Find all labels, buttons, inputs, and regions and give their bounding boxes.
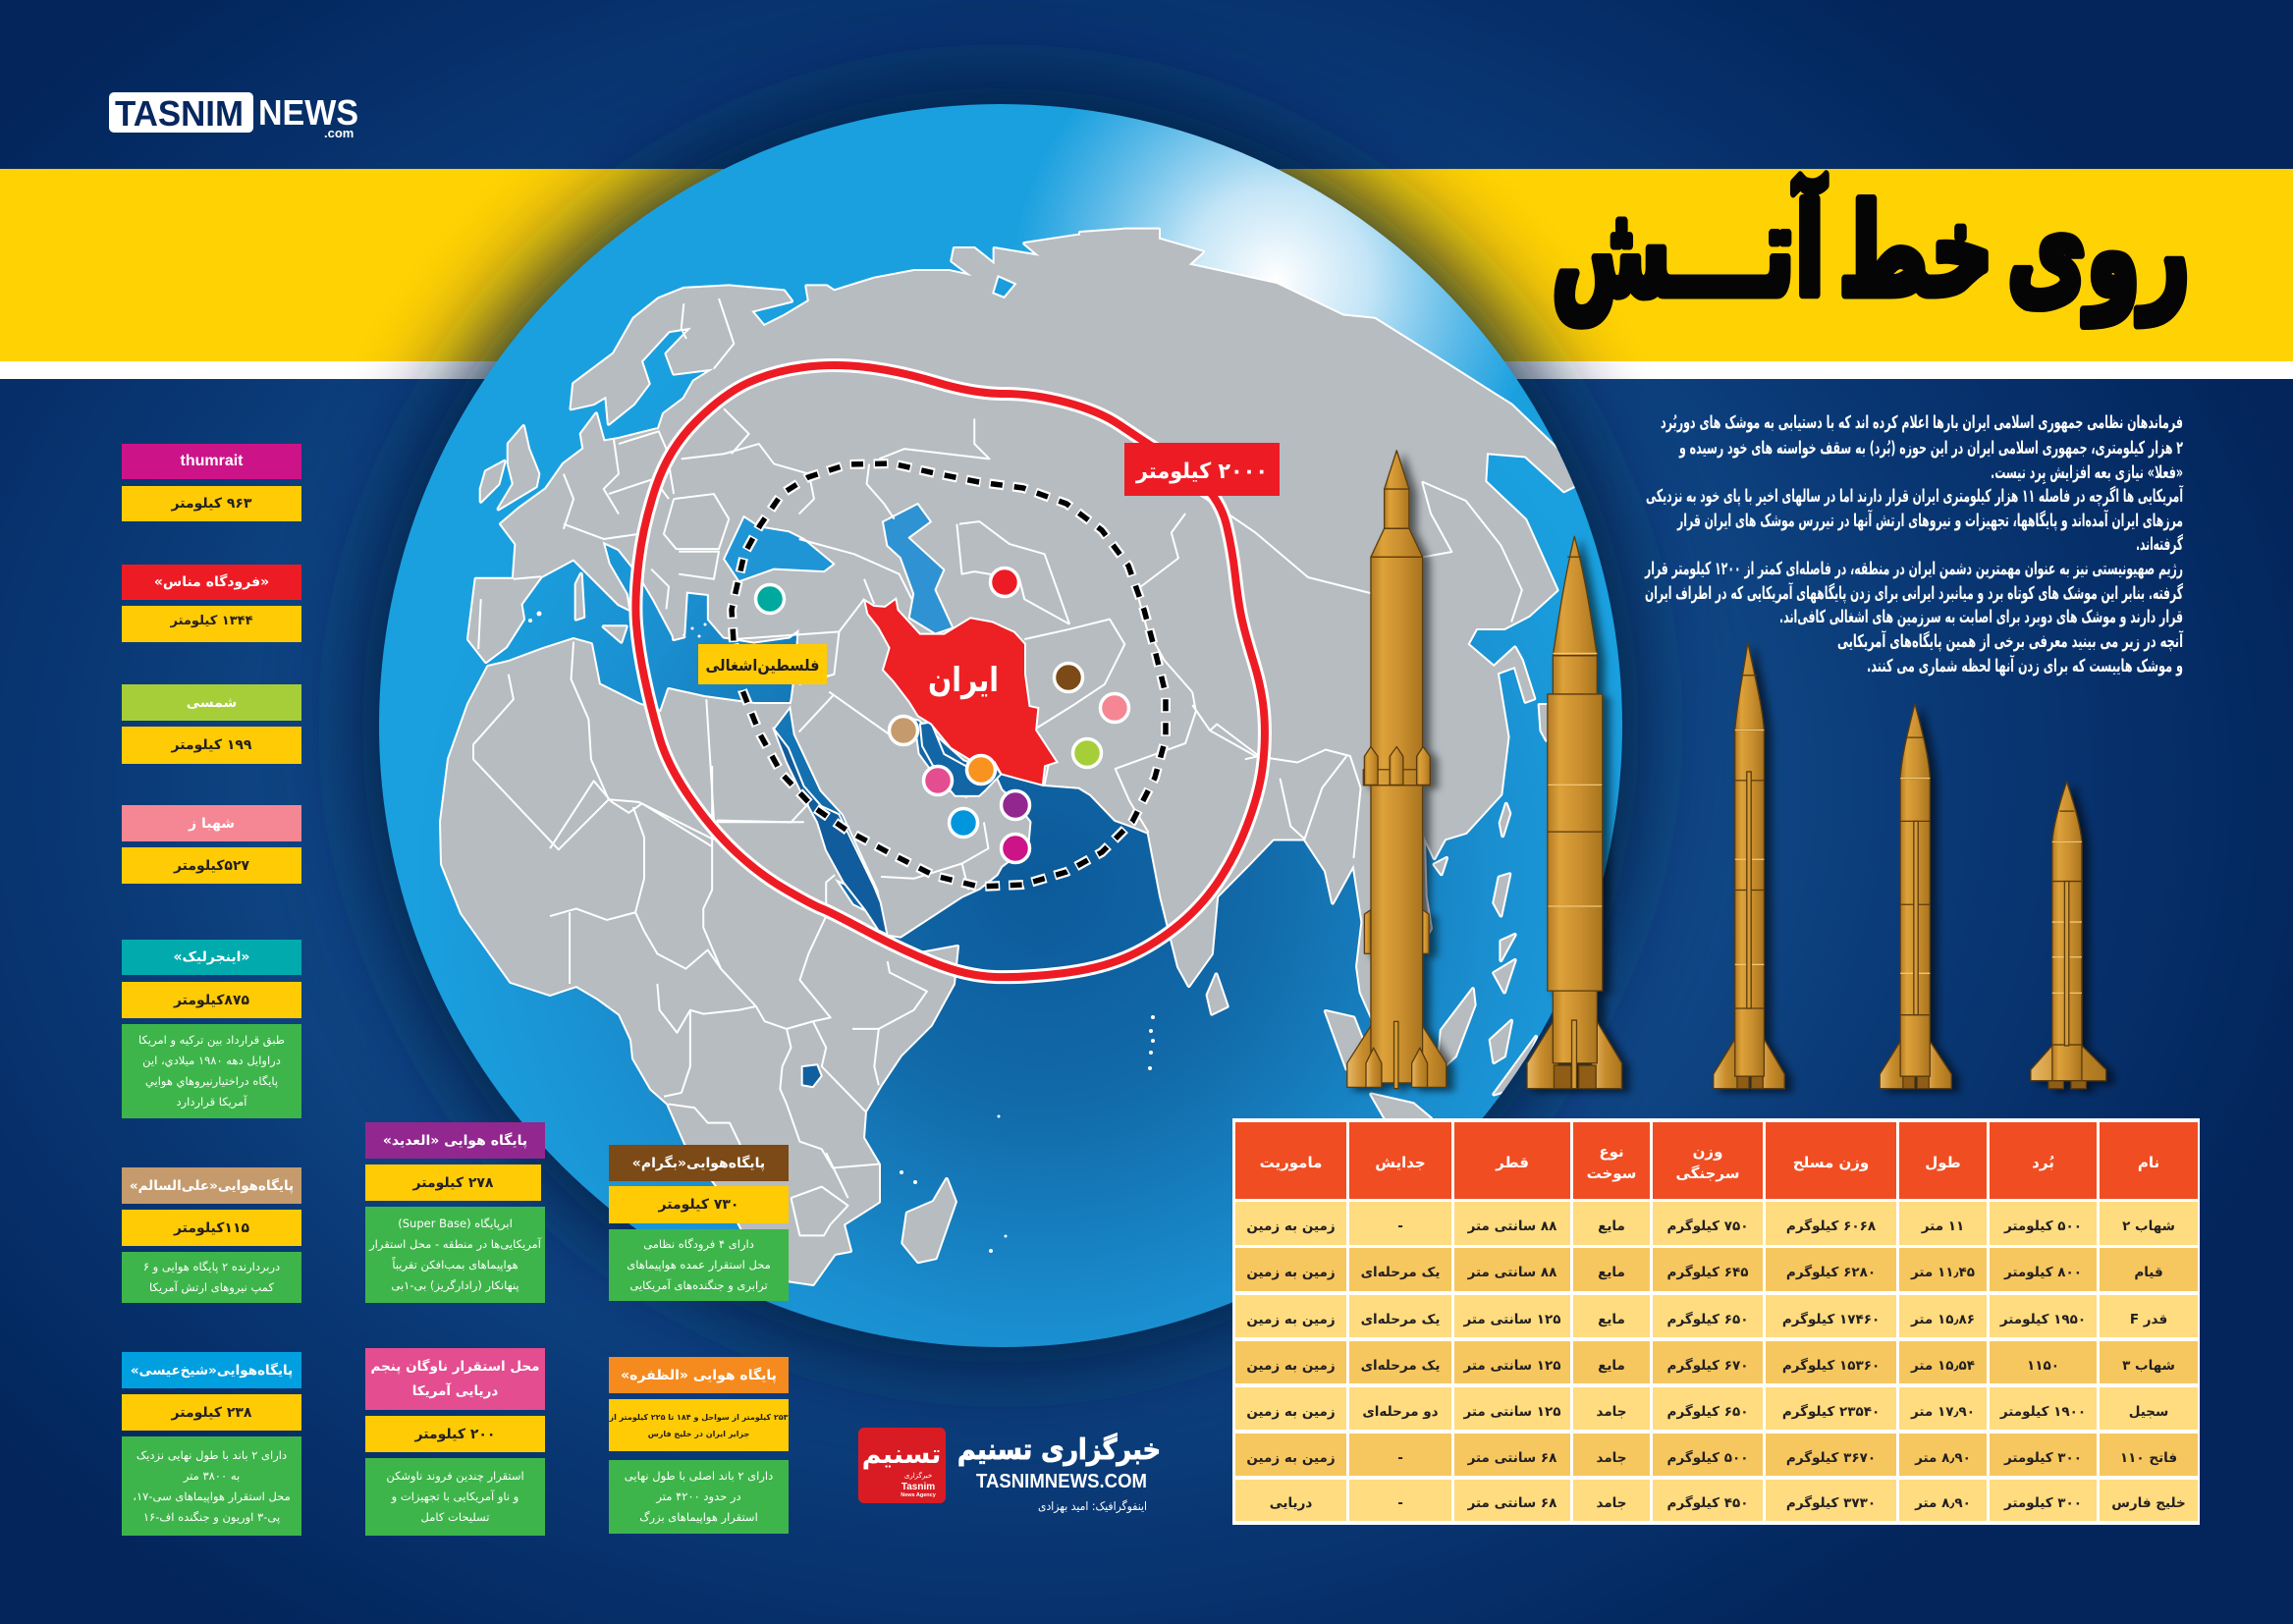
row: Sejjil: سجیل	[2129, 1404, 2168, 1420]
icon: red Tasnim badge: تسنیم	[862, 1439, 941, 1470]
intro paragraph	[1644, 412, 2184, 677]
intro paragraph: گرفته‌اند.	[2136, 533, 2183, 555]
description: به ۳۸۰۰ متر	[184, 1469, 240, 1483]
distance	[122, 1394, 301, 1431]
footer logo: Tasnim News Agency	[858, 1428, 1161, 1514]
card title	[365, 1122, 545, 1159]
distance: ۱۳۴۴ کیلومتر	[170, 614, 253, 628]
card title	[122, 684, 301, 721]
card title	[122, 444, 301, 479]
row: Shahab 2: شهاب ۲	[2122, 1218, 2175, 1234]
description: پنهانکار (رادارگریز) بی-۱بی	[391, 1278, 519, 1292]
card title: thumrait	[181, 453, 244, 469]
card title: پایگاه‌هوایی«بگرام»	[632, 1155, 765, 1170]
row: Qadr F: یک مرحله‌ای	[1361, 1312, 1440, 1327]
row: Qiam: ۸۰۰ کیلومتر	[2004, 1265, 2082, 1280]
table header: وزن	[1693, 1143, 1722, 1161]
row: Persian Gulf: دریایی	[1270, 1495, 1312, 1511]
row: Shahab 3	[1235, 1341, 2198, 1383]
table header: وزن مسلح	[1793, 1154, 1869, 1171]
description	[365, 1207, 545, 1303]
label: occupied Palestine: فلسطین‌اشغالی	[705, 656, 819, 675]
description: استقرار چندین فروند ناوشکن	[386, 1469, 524, 1483]
missile 2	[1527, 536, 1622, 1089]
table header: قطر	[1496, 1154, 1529, 1171]
description: دراوایل دهه ۱۹۸۰ میلادي، این	[142, 1054, 281, 1067]
row: Qiam: ۶۴۵ کیلوگرم	[1667, 1265, 1748, 1280]
card: Al Udeid	[365, 1122, 545, 1303]
label: 2000 km: ۲۰۰۰ کیلومتر	[1135, 460, 1268, 484]
row: Fateh 110: -	[1397, 1450, 1403, 1466]
country borders	[473, 298, 1522, 1235]
card title	[122, 1352, 301, 1388]
card title: پایگاه هوایی «الظفره»	[621, 1367, 777, 1382]
description: آمریکا قراردارد	[177, 1095, 247, 1109]
row: Qiam	[1235, 1248, 2198, 1291]
missile 3	[1714, 642, 1784, 1089]
description: آمریکایی‌ها در منطقه - محل استقرار	[369, 1237, 541, 1251]
description: ترابری و جنگنده‌های آمریکایی	[629, 1278, 768, 1292]
row: Sejjil: جامد	[1597, 1404, 1626, 1420]
row: Sejjil: ۱۲۵ سانتی متر	[1464, 1404, 1561, 1420]
card title	[122, 940, 301, 975]
card: Shamsi	[122, 684, 301, 764]
distance: ۲۰۰ کیلومتر	[415, 1426, 495, 1441]
yellow title band	[0, 169, 2293, 361]
row: Qiam: ۶۲۸۰ کیلوگرم	[1786, 1265, 1876, 1280]
row: Persian Gulf: ۶۸ سانتی متر	[1468, 1495, 1556, 1511]
description: هواپیماهای بمب‌افکن تقریباً	[392, 1258, 519, 1272]
row: Qadr F: قدر F	[2130, 1312, 2167, 1327]
row: Shahab 2: ۶۰۶۸ کیلوگرم	[1786, 1218, 1876, 1234]
distance	[609, 1399, 789, 1451]
card title: دریایی آمریکا	[412, 1382, 498, 1398]
row: Qadr F: ۱۷۴۶۰ کیلوگرم	[1782, 1312, 1880, 1327]
card: Shahbaz	[122, 805, 301, 884]
logo: Tasnim News: NEWS	[258, 92, 358, 133]
description	[365, 1458, 545, 1536]
description: پایگاه دراختیارنیروهاي هوایي	[145, 1074, 278, 1088]
row: Sejjil: ۲۳۵۴۰ کیلوگرم	[1782, 1404, 1880, 1420]
distance: ۲۳۸ کیلومتر	[172, 1404, 251, 1420]
description: استقرار هواپیماهای بزرگ	[639, 1510, 758, 1524]
distance: ۸۷۵کیلومتر	[174, 992, 249, 1007]
row: Persian Gulf: خلیج فارس	[2111, 1495, 2186, 1511]
row: Shahab 2: -	[1397, 1218, 1403, 1234]
distance: ۹۶۳ کیلومتر	[172, 496, 251, 512]
card title: شمسی	[187, 695, 237, 711]
card: Ali Al Salem	[122, 1167, 301, 1303]
row: Shahab 3: ۶۷۰ کیلوگرم	[1667, 1358, 1748, 1374]
icon: red Tasnim badge: News Agency	[901, 1492, 937, 1498]
distance	[122, 847, 301, 884]
table header: سرجنگی	[1676, 1164, 1739, 1182]
table header: جدایش	[1375, 1154, 1426, 1171]
table header: سوخت	[1587, 1164, 1636, 1182]
row: Persian Gulf: ۸٫۹۰ متر	[1915, 1495, 1971, 1511]
row: Shahab 3: ۱۵۳۶۰ کیلوگرم	[1782, 1358, 1880, 1374]
row: Shahab 3: یک مرحله‌ای	[1361, 1358, 1440, 1374]
description	[122, 1436, 301, 1536]
description	[609, 1229, 789, 1301]
logo: Tasnim News: .com	[324, 126, 354, 140]
footer logo: Tasnim News Agency: اینفوگرافیک: امید بهزادی	[1038, 1499, 1147, 1514]
missile 1	[1347, 451, 1447, 1089]
row: Fateh 110: فاتح ۱۱۰	[2120, 1450, 2177, 1466]
card: Manas	[122, 565, 301, 642]
row: Persian Gulf: -	[1397, 1495, 1403, 1511]
row: Shahab 3: شهاب ۳	[2122, 1358, 2175, 1374]
description: محل استقرار عمده هواپیماهای	[627, 1258, 771, 1272]
row: Sejjil	[1235, 1387, 2198, 1430]
description: محل استقرار هواپیماهای سی-۱۷،	[133, 1489, 291, 1502]
row: Fateh 110: ۳۶۷۰ کیلوگرم	[1786, 1450, 1876, 1466]
intro paragraph: آمریکایی ها اگرچه در فاصله ۱۱ هزار کیلومتری ایران قرار دارند اما در سالهای اخیر با پای خود به نزدیکی	[1646, 484, 2183, 507]
label: Iran: ایران	[928, 661, 999, 700]
card: Fifth Fleet	[365, 1348, 545, 1536]
row: Persian Gulf	[1235, 1480, 2198, 1521]
card title	[122, 1167, 301, 1204]
distance	[122, 727, 301, 764]
table header: طول	[1925, 1154, 1961, 1171]
row: Shahab 3: ۱۲۵ سانتی متر	[1464, 1358, 1561, 1374]
distance	[122, 606, 301, 642]
row: Sejjil: دو مرحله‌ای	[1362, 1404, 1439, 1420]
row: Qiam: مایع	[1598, 1265, 1625, 1280]
description: پی-۳ اوریون و جنگنده اف-۱۶	[143, 1510, 280, 1524]
row: Shahab 2: مایع	[1598, 1218, 1625, 1234]
row: Qadr F: ۱۲۵ سانتی متر	[1464, 1312, 1561, 1327]
distance: ۷۳۰ کیلومتر	[659, 1197, 738, 1213]
row: Fateh 110: ۳۰۰ کیلومتر	[2004, 1450, 2082, 1466]
row: Sejjil: ۱۹۰۰ کیلومتر	[2000, 1404, 2086, 1420]
card title: پایگاه‌هوایی«علی‌السالم»	[130, 1178, 294, 1194]
table header: نوع	[1599, 1143, 1624, 1161]
distance	[365, 1416, 545, 1452]
description: دربردارنده ۲ پایگاه هوایی و ۶	[143, 1260, 280, 1273]
distance	[365, 1164, 541, 1201]
distance: جزایر ایران در خلیج فارس	[648, 1430, 749, 1437]
distance: ۲۷۸ کیلومتر	[413, 1174, 493, 1190]
logo: Tasnim News	[109, 92, 358, 140]
description: کمپ نیروهای ارتش آمریکا	[149, 1280, 274, 1294]
distance	[122, 486, 301, 521]
globe shadow	[362, 87, 1639, 1364]
label: 2000 km	[1124, 443, 1280, 496]
table header: بُرد	[2032, 1154, 2054, 1171]
distance	[609, 1186, 789, 1223]
card title	[122, 805, 301, 841]
row: Shahab 3: مایع	[1598, 1358, 1625, 1374]
row: Fateh 110: زمین به زمین	[1246, 1450, 1336, 1466]
description: و ناو آمریکایی با تجهیزات و	[392, 1489, 519, 1503]
row: Sejjil: زمین به زمین	[1246, 1404, 1336, 1420]
footer logo: Tasnim News Agency: خبرگزاری تسنیم	[957, 1433, 1161, 1466]
row: Qiam: ۱۱٫۴۵ متر	[1911, 1265, 1975, 1280]
distance: ۵۲۷کیلومتر	[174, 858, 249, 874]
row: Qiam: یک مرحله‌ای	[1361, 1265, 1440, 1280]
row: Shahab 2: زمین به زمین	[1246, 1218, 1336, 1234]
row: Shahab 3: ۱۱۵۰	[2027, 1358, 2059, 1374]
base location markers	[756, 568, 1129, 862]
card: Sheikh Isa	[122, 1352, 301, 1536]
description	[122, 1024, 301, 1118]
row: Fateh 110: ۸٫۹۰ متر	[1915, 1450, 1971, 1466]
row: Qadr F: زمین به زمین	[1246, 1312, 1336, 1327]
description	[609, 1460, 789, 1534]
description: در حدود ۴۲۰۰ متر	[656, 1489, 741, 1503]
row: Qadr F: ۶۵۰ کیلوگرم	[1667, 1312, 1748, 1327]
table header: ماموریت	[1260, 1154, 1322, 1171]
label: occupied Palestine	[698, 644, 827, 684]
row: Persian Gulf: ۴۵۰ کیلوگرم	[1667, 1495, 1748, 1511]
row: Shahab 2: ۵۰۰ کیلومتر	[2004, 1218, 2082, 1234]
description	[122, 1252, 301, 1303]
distance: ۱۹۹ کیلومتر	[172, 737, 251, 753]
table header: نام	[2138, 1154, 2159, 1171]
row: Qadr F: مایع	[1598, 1312, 1625, 1327]
card: Al Dhafra	[609, 1357, 789, 1534]
row: Qadr F	[1235, 1295, 2198, 1337]
card: Bagram	[609, 1145, 789, 1301]
missile 4	[1880, 704, 1951, 1089]
row: Qiam: قیام	[2134, 1265, 2163, 1280]
card title: محل استقرار ناوگان پنجم	[370, 1359, 540, 1375]
card title	[609, 1145, 789, 1181]
card: Incirlik	[122, 940, 301, 1118]
footer logo: Tasnim News Agency: TASNIMNEWS.COM	[976, 1471, 1147, 1492]
row: Fateh 110: ۵۰۰ کیلوگرم	[1667, 1450, 1748, 1466]
table: missile specifications	[1232, 1118, 2200, 1525]
card title: پایگاه‌هوایی«شیخ‌عیسی»	[131, 1363, 293, 1379]
card title: «اینجرلیک»	[174, 949, 249, 965]
Iran highlighted	[864, 599, 1058, 785]
distance	[122, 1210, 301, 1246]
row: Sejjil: ۱۷٫۹۰ متر	[1911, 1404, 1975, 1420]
small islands	[528, 611, 1155, 1253]
table header	[1235, 1122, 2198, 1199]
card title	[122, 565, 301, 600]
icon: red Tasnim badge: خبرگزاری	[904, 1471, 932, 1480]
row: Shahab 2	[1235, 1202, 2198, 1245]
logo: Tasnim News: TASNIM	[115, 93, 244, 134]
distance	[122, 982, 301, 1018]
icon: red Tasnim badge	[858, 1428, 946, 1503]
missile 5	[2031, 782, 2106, 1089]
globe with world map	[379, 104, 1622, 1347]
missiles	[1347, 451, 2106, 1089]
row: Shahab 3: ۱۵٫۵۴ متر	[1911, 1358, 1975, 1374]
card title: شهبا ز	[189, 815, 235, 831]
row: Qiam: زمین به زمین	[1246, 1265, 1336, 1280]
row: Sejjil: ۶۵۰ کیلوگرم	[1667, 1404, 1748, 1420]
description: ابرپایگاه (Super Base)	[398, 1217, 513, 1230]
description: دارای ۴ فرودگاه نظامی	[643, 1237, 754, 1251]
distance: ۱۱۵کیلومتر	[174, 1219, 249, 1235]
dashed inner range ring	[732, 463, 1166, 887]
card: Thumrait	[122, 444, 301, 521]
row: Qadr F: ۱۵٫۸۶ متر	[1911, 1312, 1975, 1327]
description: دارای ۲ باند با طول نهایی نزدیک	[136, 1447, 287, 1461]
inland and enclosed seas	[724, 504, 1001, 1087]
card title: «فرودگاه مناس»	[154, 574, 269, 590]
card title	[365, 1348, 545, 1410]
description: تسلیحات کامل	[420, 1510, 489, 1524]
white stripe under band	[0, 361, 2293, 379]
row: Persian Gulf: جامد	[1597, 1495, 1626, 1511]
distance: ۲۵۳ کیلومتر از سواحل و ۱۸۴ تا ۲۲۵ کیلومتر از	[609, 1412, 789, 1422]
row: Shahab 3: زمین به زمین	[1246, 1358, 1336, 1374]
card title	[609, 1357, 789, 1393]
row: Persian Gulf: ۳۰۰ کیلومتر	[2004, 1495, 2082, 1511]
row: Persian Gulf: ۳۷۳۰ کیلوگرم	[1786, 1495, 1876, 1511]
description: طبق قرارداد بین ترکیه و امریکا	[138, 1033, 285, 1047]
description: دارای ۲ باند اصلی با طول نهایی	[625, 1469, 773, 1483]
row: Qiam: ۸۸ سانتی متر	[1468, 1265, 1556, 1280]
row: Shahab 2: ۷۵۰ کیلوگرم	[1667, 1218, 1748, 1234]
row: Shahab 2: ۱۱ متر	[1922, 1218, 1964, 1234]
card title: پایگاه هوایی «العدید»	[383, 1133, 527, 1149]
red 2000 km range ring	[635, 365, 1265, 977]
icon: red Tasnim badge: Tasnim	[901, 1482, 935, 1492]
row: Fateh 110: جامد	[1597, 1450, 1626, 1466]
row: Qadr F: ۱۹۵۰ کیلومتر	[2000, 1312, 2086, 1327]
row: Shahab 2: ۸۸ سانتی متر	[1468, 1218, 1556, 1234]
row: Fateh 110: ۶۸ سانتی متر	[1468, 1450, 1556, 1466]
row: Fateh 110	[1235, 1434, 2198, 1476]
